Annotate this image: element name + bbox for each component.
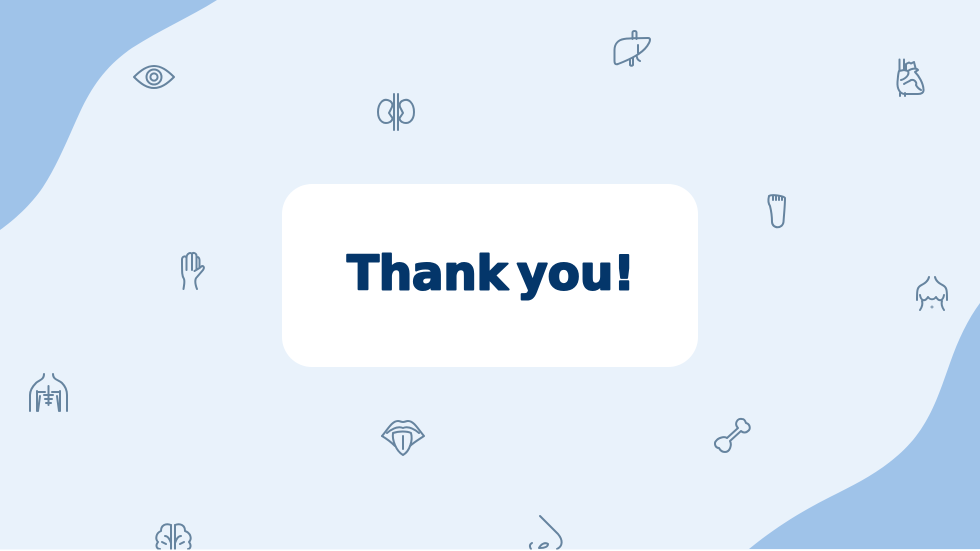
icon: brain	[156, 524, 191, 549]
icon: hand	[182, 253, 204, 289]
icon: chest	[917, 277, 947, 310]
icon: bone	[715, 419, 750, 452]
icon: eye	[134, 66, 174, 88]
blob: top left corner	[0, 0, 217, 230]
icon: foot	[768, 195, 785, 227]
heading: Thank you!: you!	[517, 246, 635, 302]
heading: Thank you!: Thank	[347, 246, 509, 302]
blob: bottom right corner	[749, 303, 980, 549]
white card	[282, 184, 698, 367]
icon: heart	[897, 60, 924, 96]
icon: nose	[530, 516, 562, 549]
bottom edge strip	[0, 550, 980, 551]
icon: liver	[614, 31, 650, 66]
icon: torso	[30, 374, 67, 411]
icon: kidneys	[378, 94, 414, 130]
icon: mouth with tongue	[382, 421, 424, 455]
